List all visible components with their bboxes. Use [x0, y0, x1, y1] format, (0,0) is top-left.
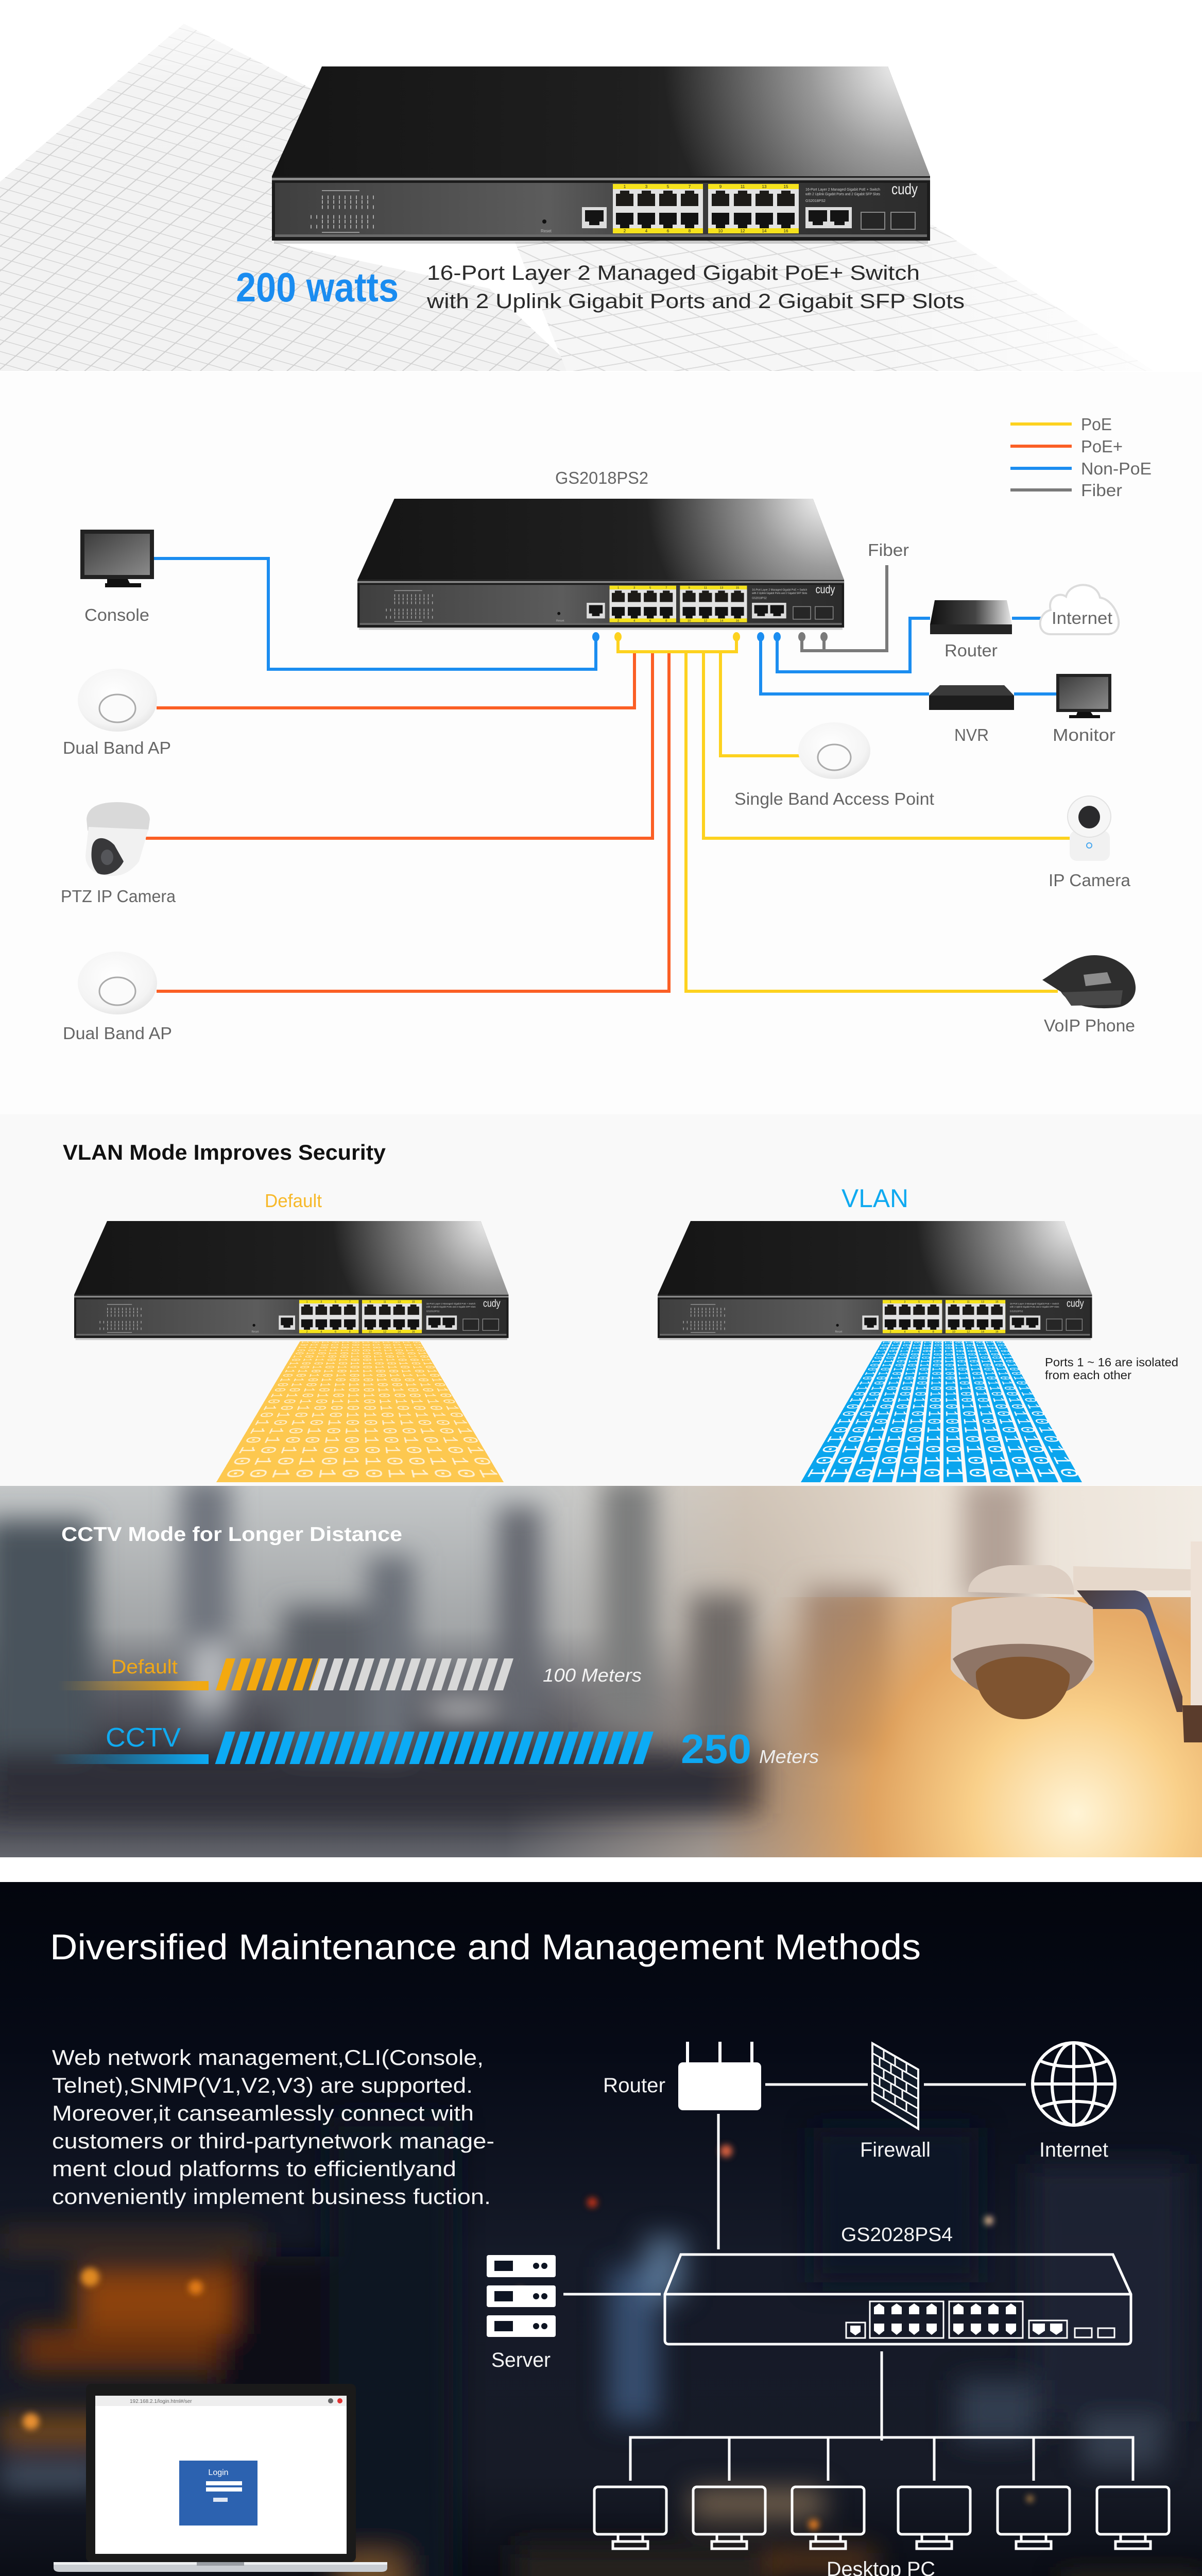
icon: dual band AP [78, 669, 157, 732]
product description: 16-Port Layer 2 Managed Gigabit PoE+ Switch [427, 262, 920, 284]
label: single band access point: Single Band Access Point [734, 789, 934, 808]
label: internet: Internet [1052, 608, 1112, 628]
default label: Default [265, 1190, 322, 1211]
icon: router [678, 2042, 761, 2110]
label: fiber: Fiber [868, 540, 909, 560]
heading: Diversified Maintenance and Management Methods [50, 1927, 921, 1967]
label: dual band AP: Dual Band AP [63, 738, 171, 757]
default switch [74, 1217, 508, 1340]
icon: PTZ camera [85, 802, 150, 876]
CCTV distance bar [50, 1723, 819, 1772]
legend: PoE+ [1081, 437, 1123, 456]
label: monitor: Monitor [1053, 725, 1115, 744]
label: internet: Internet [1039, 2139, 1108, 2161]
default mode data beam: 010010110101010010110101 [410, 1342, 504, 1482]
connection lines [563, 2084, 1133, 2481]
CCTV distance bar: Meters [759, 1746, 819, 1767]
label: NVR: NVR [954, 725, 989, 744]
blurred city background [0, 1479, 1202, 1857]
label: console: Console [84, 605, 149, 624]
legend: PoE [1081, 415, 1112, 434]
VLAN label: VLAN [842, 1184, 908, 1213]
icon: VoIP phone [1042, 955, 1136, 1008]
section: hero [0, 21, 1164, 372]
product description: with 2 Uplink Gigabit Ports and 2 Gigabit SFP Slots [426, 290, 965, 313]
label: PTZ IP camera: PTZ IP Camera [61, 887, 176, 906]
icon: server [487, 2255, 556, 2337]
product description [426, 262, 965, 313]
label: server: Server [491, 2349, 551, 2371]
label: firewall: Firewall [860, 2139, 931, 2161]
description paragraph: Web network management,CLI(Console, [52, 2045, 484, 2070]
section: CCTV photo [0, 1479, 1202, 1857]
default distance bar: 100 Meters [543, 1665, 642, 1686]
VLAN heading: VLAN Mode Improves Security [63, 1140, 386, 1164]
power headline: 200 watts [236, 264, 399, 310]
icon: internet cloud [1040, 585, 1119, 634]
default distance bar: Default [111, 1656, 178, 1678]
legend [1010, 415, 1152, 500]
port connector dots [592, 632, 828, 641]
icon: NVR [929, 685, 1014, 710]
section: network topology [0, 372, 1202, 1114]
legend: Non-PoE [1081, 459, 1152, 478]
description paragraph: ment cloud platforms to efficientlyand [52, 2157, 456, 2181]
icon: console monitor [80, 530, 154, 587]
cables [146, 558, 1072, 991]
VLAN switch [658, 1217, 1092, 1340]
default mode data beam: 101001011101001010110100 [216, 1342, 310, 1482]
isolated ports note [1045, 1355, 1178, 1382]
label: dual band AP 2: Dual Band AP [63, 1024, 172, 1043]
label: IP camera: IP Camera [1049, 871, 1131, 890]
icon: single band access point [798, 722, 870, 779]
switch product photo [272, 61, 930, 244]
label: switch model: GS2028PS4 [841, 2224, 953, 2246]
laptop with login page: Login [208, 2468, 229, 2477]
label: router: Router [603, 2074, 665, 2097]
description paragraph: Moreover,it canseamlessly connect with [52, 2101, 474, 2125]
CCTV distance bar: CCTV [106, 1723, 181, 1753]
description paragraph: Telnet),SNMP(V1,V2,V3) are supported. [52, 2073, 473, 2097]
description paragraph: conveniently implement business fuction. [52, 2184, 491, 2209]
building background [0, 21, 1164, 372]
description paragraph: customers or third-partynetwork manage- [52, 2129, 494, 2153]
icon: firewall [872, 2043, 918, 2129]
laptop with login page [54, 2384, 387, 2572]
description paragraph [52, 2045, 494, 2209]
label: VoIP phone: VoIP Phone [1044, 1016, 1135, 1035]
icon: router [930, 600, 1012, 634]
default distance bar [58, 1656, 642, 1690]
VLAN mode isolated data beams [801, 1342, 1086, 1482]
laptop with login page: 192.168.2.1/login.html#/ser [130, 2399, 192, 2404]
isolated ports note: from each other [1045, 1368, 1131, 1382]
camera on wall mount [951, 1541, 1202, 1742]
section: maintenance and management [0, 1882, 1202, 2576]
CCTV heading: CCTV Mode for Longer Distance [61, 1523, 402, 1546]
icon: monitor [1056, 674, 1111, 718]
model label: GS2018PS2 [555, 468, 648, 487]
section: VLAN [0, 1114, 1202, 1485]
icon: IP camera [1068, 796, 1111, 861]
default mode data beam [216, 1342, 504, 1482]
icon: dual band AP 2 [78, 952, 157, 1014]
night city background [0, 1882, 1202, 2576]
icon: switch outline [665, 2255, 1131, 2344]
switch [357, 495, 844, 630]
CCTV distance bar: 250 [681, 1726, 751, 1772]
legend: Fiber [1081, 481, 1122, 500]
icon: desktop PCs [594, 2487, 1169, 2549]
label: router: Router [945, 641, 998, 660]
isolated ports note: Ports 1 ~ 16 are isolated [1045, 1355, 1178, 1369]
icon: globe [1033, 2043, 1115, 2125]
